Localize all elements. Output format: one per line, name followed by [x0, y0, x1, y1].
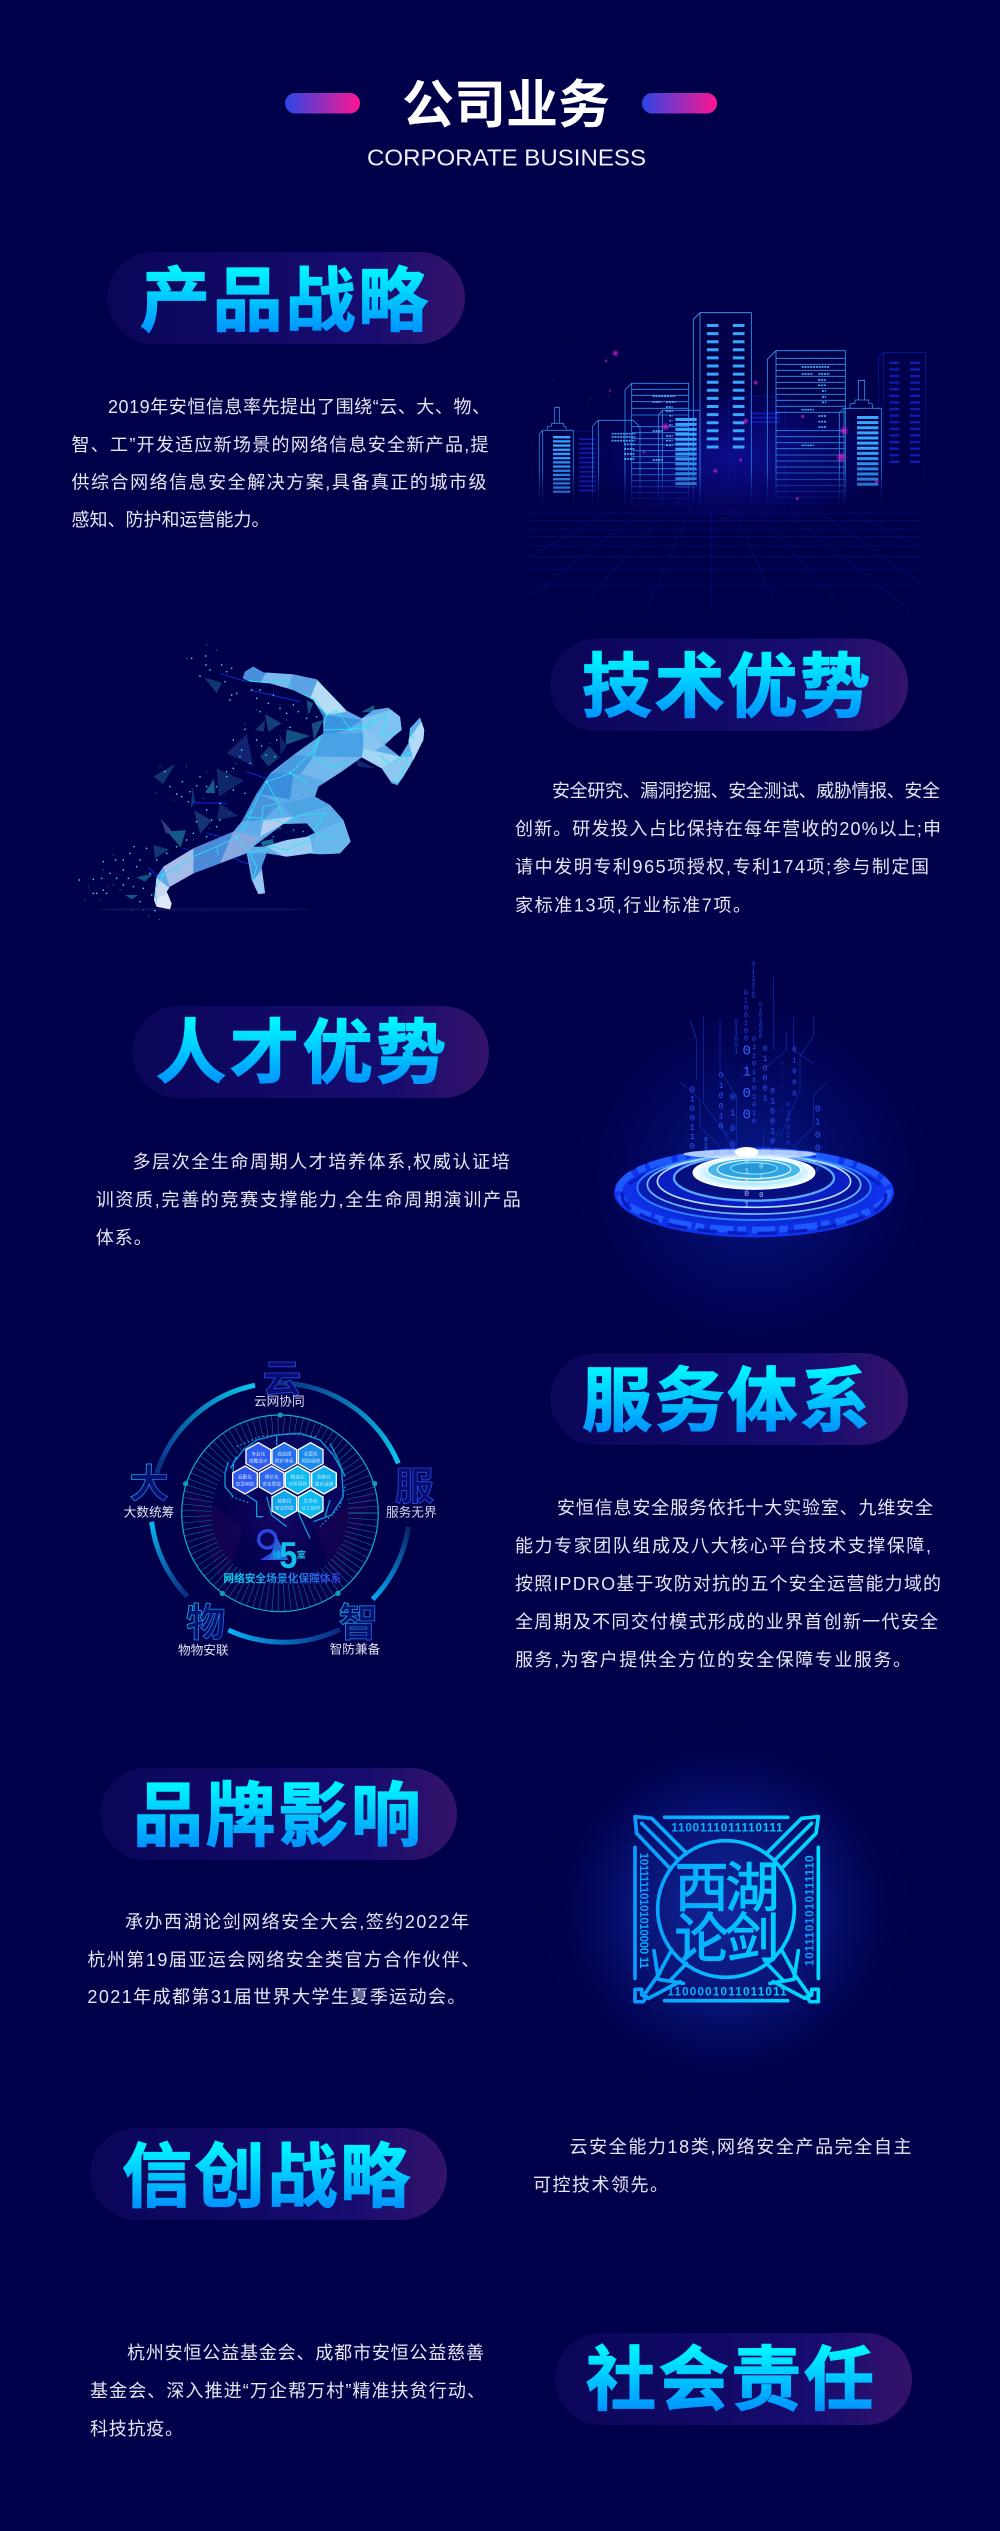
binary columns: 0100100	[742, 990, 750, 1043]
binary over disc: 01001	[742, 1157, 751, 1210]
text block: 信创战略: 云安全能力18类,网络安全产品完全自主	[570, 2137, 912, 2157]
emblem characters	[675, 1844, 779, 1973]
title block	[285, 63, 717, 170]
diagram: 九维五室 security system: 后勤化	[238, 1474, 252, 1481]
cyan particle dots	[79, 656, 317, 911]
diagram caption: 网络安全场景化保障体系	[223, 1571, 342, 1586]
binary columns: 0100	[739, 1043, 755, 1123]
illustration: neon city skyline	[530, 313, 926, 610]
binary strings: 10111110101010000 11	[637, 1853, 650, 1969]
frame bars	[635, 1817, 818, 2001]
diagram: 九维五室 security system: 应急响应	[236, 1480, 255, 1487]
outer disc	[614, 1147, 894, 1237]
diagram: 九维五室 security system: 增长化	[265, 1474, 279, 1481]
text block: 服务体系: 服务,为客户提供全方位的安全保障专业服务。	[515, 1650, 911, 1670]
text block: 服务体系	[515, 1498, 941, 1670]
binary columns: 01000	[778, 1060, 786, 1115]
inner spoke circle	[197, 1430, 363, 1597]
panel: 技术优势 heading	[550, 638, 908, 731]
text block: 品牌影响: 2021年成都第31届世界大学生夏季运动会。	[87, 1987, 465, 2007]
diagram: 九维五室 security system: 全面化	[304, 1451, 318, 1458]
label: 物物安联: 物物安联	[178, 1640, 229, 1659]
brain circuit	[225, 1433, 345, 1538]
text block: 信创战略: 可控技术领先。	[533, 2175, 668, 2195]
left title pill	[285, 93, 360, 114]
binary over disc	[742, 1153, 822, 1210]
outline glyph: 智: 智	[339, 1592, 378, 1649]
text block: 社会责任: 科技抗疫。	[90, 2419, 183, 2439]
diagram: 九维五室 security system: 分工协作	[301, 1504, 320, 1511]
illustration: holographic data ring	[573, 960, 933, 1357]
label: 服务无界: 服务无界	[386, 1502, 437, 1521]
emblem characters: 论	[675, 1894, 729, 1973]
panel: 人才优势 heading: 人才优势	[156, 1014, 446, 1092]
outline glyph: 云: 云	[263, 1348, 301, 1404]
diagram: 九维五室 security system: 安全防控	[275, 1504, 294, 1511]
binary columns: 0100	[727, 1092, 738, 1150]
circuit traces	[680, 977, 827, 1150]
text block: 技术优势: 创新。研发投入占比保持在每年营收的20%以上;申	[515, 819, 941, 839]
diagram: 九维五室 security system: 智能化	[277, 1498, 292, 1505]
hexagon cluster	[233, 1443, 336, 1518]
text block: 技术优势: 请中发明专利965项授权,专利174项;参与制定国	[515, 857, 929, 877]
blue connecting lines	[148, 673, 313, 880]
binary columns	[687, 960, 823, 1167]
shard particles	[125, 677, 375, 899]
emblem characters: 西	[675, 1844, 729, 1923]
binary strings	[637, 1822, 816, 1998]
text block: 人才优势: 训资质,完善的竞赛支撑能力,全生命周期演训产品	[96, 1190, 521, 1210]
text block: 服务体系: 安恒信息安全服务依托十大实验室、九维安全	[557, 1498, 933, 1518]
diagram: 九维五室 security system: 精益化	[291, 1474, 305, 1481]
binary columns: 010010	[716, 1072, 725, 1132]
binary columns: 010010	[768, 1087, 778, 1147]
text block: 产品战略: 感知、防护和运营能力。	[72, 510, 270, 530]
right title pill	[642, 93, 717, 114]
text block: 社会责任	[90, 2343, 485, 2439]
text block: 产品战略	[72, 397, 490, 530]
glow	[529, 1713, 923, 2107]
sprinter silhouette	[150, 663, 430, 913]
text block: 人才优势: 体系。	[96, 1228, 152, 1248]
outline glyph: 物: 物	[186, 1592, 225, 1649]
panel: 社会责任 heading: 社会责任	[586, 2341, 874, 2419]
ring nodes	[183, 1412, 377, 1596]
panel: 品牌影响 heading: 品牌影响	[133, 1777, 421, 1855]
panel: 服务体系 heading: 服务体系	[582, 1362, 870, 1440]
text block: 社会责任: 基金会、深入推进“万企帮万村”精准扶贫行动、	[90, 2381, 485, 2401]
text block: 产品战略: 2019年安恒信息率先提出了围绕“云、大、物、	[108, 397, 490, 417]
binary columns: 0100110	[687, 1085, 697, 1152]
text block: 人才优势: 多层次全生命周期人才培养体系,权威认证培	[133, 1152, 510, 1172]
top swords	[635, 1817, 687, 1868]
binary columns: 010010	[784, 1102, 791, 1147]
panel: 信创战略 heading: 信创战略	[122, 2138, 410, 2216]
label: 云网协同: 云网协同	[254, 1390, 305, 1409]
logo: 9维5室: 维	[273, 1549, 282, 1561]
binary over disc: 0100	[757, 1163, 765, 1200]
binary columns: 01101101010	[750, 1035, 758, 1125]
panel: 信创战略 heading	[90, 2128, 447, 2220]
emblem characters: 剑	[725, 1894, 779, 1973]
text block: 品牌影响: 杭州第19届亚运会网络安全类官方合作伙伴、	[87, 1950, 479, 1970]
diagram: 九维五室 security system: 安全管控	[262, 1480, 281, 1487]
panel: 社会责任 heading	[555, 2333, 912, 2425]
logo: 9维5室	[259, 1531, 306, 1576]
text block: 技术优势: 安全研究、漏洞挖掘、安全测试、威胁情报、安全	[552, 781, 940, 801]
outline glyph: 大: 大	[129, 1453, 169, 1510]
subtitle: CORPORATE BUSINESS	[367, 144, 646, 170]
text block: 服务体系: 能力专家团队组成及八大核心平台技术支撑保障,	[515, 1536, 931, 1556]
illustration: 西湖论剑 sword emblem	[529, 1713, 923, 2107]
binary over disc: 010	[814, 1153, 822, 1173]
logo: 9维5室: 5	[279, 1534, 297, 1576]
label: 大数统筹: 大数统筹	[124, 1502, 174, 1521]
text block: 技术优势	[515, 781, 941, 916]
binary columns: 01110	[702, 1137, 709, 1167]
leg gap	[253, 823, 315, 847]
diagram: 九维五室 security system: 高能化	[317, 1474, 331, 1481]
binary columns: 01000	[790, 1047, 798, 1098]
binary strings: 1100001011011011	[667, 1985, 787, 1998]
diagram: 九维五室 security system: 专业化	[251, 1451, 266, 1458]
binary columns: 01000	[812, 1103, 823, 1167]
diagram: 九维五室 security system: 生命化	[304, 1498, 318, 1505]
cyan wireframe	[155, 680, 413, 902]
text block: 人才优势	[96, 1152, 521, 1248]
panel: 人才优势 heading	[132, 1006, 489, 1098]
diagram: 九维五室 security system: 防护体系	[275, 1457, 294, 1464]
outer ring arcs	[152, 1383, 408, 1642]
label: 智防兼备: 智防兼备	[330, 1639, 381, 1658]
text block: 品牌影响	[87, 1912, 479, 2007]
diagram: 九维五室 security system: 高选线	[277, 1451, 292, 1458]
emblem characters: 湖	[725, 1844, 779, 1923]
text block: 品牌影响: 承办西湖论剑网络安全大会,签约2022年	[125, 1912, 469, 1932]
diagram: 九维五室 security system	[124, 1348, 437, 1659]
text block: 信创战略	[533, 2137, 912, 2195]
text block: 服务体系: 按照IPDRO基于攻防对抗的五个安全运营能力域的	[515, 1574, 941, 1594]
diagram: 九维五室 security system: 前瞻设计	[249, 1457, 268, 1464]
binary columns: 011001	[732, 1018, 739, 1055]
star-fan line fills	[183, 1415, 377, 1613]
logo: 9维5室: 室	[297, 1547, 306, 1561]
glow	[573, 997, 933, 1357]
text block: 社会责任: 杭州安恒公益基金会、成都市安恒公益慈善	[127, 2343, 484, 2363]
binary columns: 0110010	[749, 960, 757, 1000]
panel: 产品战略 heading	[107, 252, 465, 344]
outline glyph: 服: 服	[395, 1455, 434, 1512]
binary columns: 0101000	[757, 1002, 764, 1040]
binary strings: 1011101010111110	[803, 1855, 816, 1966]
diagram: 九维五室 security system: 高价运维	[315, 1480, 334, 1487]
emblem ring	[658, 1841, 794, 1977]
panel: 技术优势 heading: 技术优势	[582, 648, 870, 726]
illustration: low-poly sprinter with particles	[79, 645, 430, 919]
binary strings: 1100111011110111	[671, 1822, 783, 1835]
binary columns: 010001	[760, 1045, 769, 1103]
panel: 服务体系 heading	[550, 1353, 908, 1445]
text block: 技术优势: 家标准13项,行业标准7项。	[515, 896, 751, 916]
text block: 服务体系: 全周期及不同交付模式形成的业界首创新一代安全	[515, 1612, 938, 1632]
diagram: 九维五室 security system: 分析研判	[288, 1480, 307, 1487]
heading: 公司业务: 公司业务	[402, 63, 610, 138]
diagram: 九维五室 security system: 风险保障	[301, 1457, 320, 1464]
brain backdrop	[232, 1433, 345, 1527]
text block: 产品战略: 供综合网络信息安全解决方案,具备真正的城市级	[72, 472, 486, 492]
panel: 品牌影响 heading	[100, 1768, 457, 1860]
ground shadow	[97, 907, 310, 911]
text block: 产品战略: 智、工”开发适应新场景的网络信息安全新产品,提	[72, 435, 488, 455]
lower swords	[635, 1950, 687, 2002]
panel: 产品战略 heading: 产品战略	[140, 262, 428, 340]
